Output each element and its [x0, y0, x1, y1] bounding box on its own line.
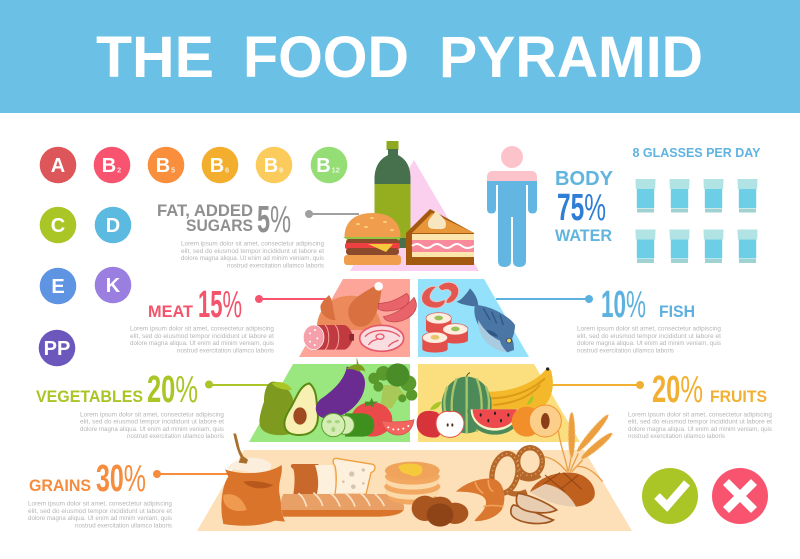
pyramid tier: fish	[418, 279, 529, 357]
text: meat description: elit, sed do eiusmod tempor incididunt ut labore et	[130, 333, 274, 340]
text: fish description: elit, sed do eiusmod tempor incididunt ut labore et	[577, 333, 721, 340]
vitamin B12	[311, 147, 347, 183]
label: fish 10%: 10%	[601, 284, 646, 326]
text: fish description: nostrud exercitation ullamco laboris	[577, 348, 675, 354]
vitamin B6: B	[210, 155, 224, 177]
text: grains description: Lorem ipsum dolor sit amet, consectetur adipiscing	[28, 500, 172, 508]
vitamin C	[40, 207, 76, 243]
text: meat description: nostrud exercitation ullamco laboris	[177, 348, 275, 354]
text: fat description: nostrud exercitation ullamco laboris	[227, 262, 325, 270]
vitamin B2: B	[102, 155, 116, 177]
icon: sausages	[378, 293, 416, 322]
glass 4	[738, 179, 758, 212]
text: vegetables description: nostrud exercitation ullamco laboris	[127, 433, 225, 440]
icon: pear	[259, 382, 293, 435]
vitamin A	[40, 147, 76, 183]
icon: sliced bread loaf	[291, 458, 375, 495]
vitamin B5	[148, 147, 184, 183]
vitamin B9: 9	[279, 166, 283, 174]
icon: watermelon	[442, 373, 492, 433]
label: fruits 20%: FRUITS	[710, 388, 767, 406]
icon: banana bunch	[488, 367, 553, 412]
icon: baguette	[281, 493, 404, 517]
icon: fish	[457, 288, 515, 352]
label: fat, added sugars: FAT, ADDED	[157, 202, 253, 220]
glass 5	[636, 230, 656, 263]
label: fish 10%: FISH	[659, 303, 695, 321]
icon: eggplant	[316, 357, 365, 418]
title: PYRAMID	[439, 25, 703, 90]
wheat ears	[568, 412, 614, 461]
title	[96, 25, 703, 90]
vitamin B2	[94, 147, 130, 183]
vitamin K	[95, 267, 131, 303]
leader line: meat	[255, 295, 331, 303]
title: FOOD	[243, 25, 409, 90]
label: body 75% water: WATER	[555, 226, 612, 245]
round loaf	[530, 472, 595, 507]
vitamin B12: B	[316, 155, 331, 177]
text: vegetables description: dolore magna aliqua. Ut enim ad minim veniam, quis	[80, 426, 225, 433]
vitamin B6: 6	[225, 166, 229, 174]
icon: broccoli	[368, 363, 417, 408]
text: vegetables description: Lorem ipsum dolor sit amet, consectetur adipiscing	[80, 412, 224, 418]
text: fish description: dolore magna aliqua. Ut enim ad minim veniam, quis	[577, 340, 722, 347]
text: fruits description: dolore magna aliqua. Ut enim ad minim veniam, quis	[628, 426, 773, 433]
vitamin A: A	[51, 155, 65, 177]
icon: cucumber	[322, 413, 374, 437]
icon: watermelon slice	[467, 409, 522, 435]
label: fat, added sugars: SUGARS	[186, 217, 253, 235]
label: fish 10%	[601, 284, 695, 326]
vitamin B2: 2	[117, 166, 121, 174]
icon: human body water level	[487, 146, 537, 267]
icon: roast chicken	[317, 282, 383, 330]
icon: cross badge	[712, 468, 768, 524]
icon: wheat stalks and loaf	[530, 412, 614, 507]
icon: pretzel	[488, 448, 542, 496]
text: fruits description: nostrud exercitation ullamco laboris	[628, 433, 726, 440]
vitamin B12: 12	[332, 166, 340, 174]
label: fat, added sugars	[157, 199, 291, 241]
pyramid tier: meat	[299, 279, 410, 357]
text: fat description: Lorem ipsum dolor sit amet, consectetur adipiscing	[181, 240, 324, 248]
text: grains description: dolore magna aliqua. Ut enim ad minim veniam, quis	[28, 515, 173, 522]
pyramid tier: vegetables	[249, 364, 410, 442]
text: fat description	[181, 240, 325, 270]
vitamin C: C	[51, 215, 65, 237]
glass 3	[704, 179, 724, 212]
vitamin B9: B	[264, 155, 278, 177]
text: fish description	[577, 326, 722, 354]
glass 1	[636, 179, 656, 212]
label: fruits 20%	[652, 369, 767, 411]
header band	[0, 0, 800, 113]
icon: bread slices	[511, 493, 557, 524]
wheat stems	[542, 430, 603, 482]
icon: sushi rolls	[422, 313, 468, 352]
vitamin E	[40, 268, 76, 304]
text: meat description: dolore magna aliqua. Ut enim ad minim veniam, quis	[130, 340, 275, 347]
leader line: fat	[305, 210, 359, 218]
text: fruits description	[628, 412, 773, 440]
pyramid tier: fats	[350, 160, 479, 271]
label: grains 30%: 30%	[96, 458, 146, 500]
label: body 75% water: 75%	[557, 187, 606, 229]
leader line: vegetables	[205, 380, 269, 388]
vitamin PP: PP	[44, 338, 70, 360]
icon: salami	[303, 325, 354, 350]
glass 2	[670, 179, 690, 212]
leader line: fish	[496, 295, 593, 303]
glass 6	[670, 230, 690, 263]
grains illustration	[221, 433, 557, 527]
label: grains 30%	[29, 458, 146, 500]
icon: shrimps	[422, 282, 459, 308]
label: body 75% water: BODY	[555, 168, 614, 190]
pyramid tier: fruits	[418, 364, 580, 442]
label: meat 15%	[148, 284, 242, 326]
vitamin D	[95, 207, 131, 243]
text: grains description	[28, 500, 173, 530]
text: fat description: elit, sed do eiusmod tempor incididunt ut labore et	[181, 248, 324, 255]
glasses of water grid	[636, 179, 758, 263]
text: fruits description: elit, sed do eiusmod tempor incididunt ut labore et	[628, 418, 772, 426]
text: fish description: Lorem ipsum dolor sit amet, consectetur adipiscing	[577, 326, 721, 332]
icon: cake slice	[406, 209, 474, 265]
fish foods illustration	[422, 282, 515, 352]
vitamin B9	[256, 147, 292, 183]
text: vegetables description	[80, 412, 225, 440]
leader line: fruits	[550, 381, 644, 389]
icon: tomato slice	[382, 420, 414, 435]
icon: peach	[512, 395, 561, 437]
label: fat, added sugars: 5%	[257, 199, 291, 241]
vitamin PP	[39, 330, 75, 366]
text: fat description: dolore magna aliqua. Ut enim ad minim veniam, quis	[181, 255, 325, 262]
glass 8	[738, 230, 758, 263]
label: vegetables 20%	[36, 369, 198, 411]
vegetables illustration	[259, 357, 417, 437]
glass 7	[704, 230, 724, 263]
text: meat description: Lorem ipsum dolor sit amet, consectetur adipiscing	[130, 326, 274, 332]
icon: pancake stack	[384, 462, 440, 505]
label: vegetables 20%: 20%	[147, 369, 198, 411]
vitamin E: E	[51, 276, 65, 298]
icon: tomato	[351, 398, 392, 437]
icon: croissant	[456, 479, 504, 521]
vitamin K: K	[106, 275, 121, 297]
text: grains description: nostrud exercitation ullamco laboris	[75, 522, 173, 530]
icon: flour sack	[221, 433, 285, 526]
label: meat 15%: MEAT	[148, 303, 193, 321]
leader line: grains	[153, 470, 229, 478]
text: vegetables description: elit, sed do eiusmod tempor incididunt ut labore et	[80, 418, 224, 426]
label: grains 30%: GRAINS	[29, 477, 91, 495]
text: fruits description: Lorem ipsum dolor sit amet, consectetur adipiscing	[628, 412, 772, 418]
icon: steak	[360, 325, 404, 351]
icon: apple	[417, 402, 464, 437]
vitamin badges	[39, 147, 347, 366]
text: grains description: elit, sed do eiusmod tempor incididunt ut labore et	[28, 508, 172, 515]
title: THE	[96, 25, 214, 90]
text: meat description	[130, 326, 275, 354]
vitamin B5: 5	[171, 166, 175, 174]
icon: wine bottle	[374, 141, 410, 248]
icon: braided challah	[412, 496, 468, 527]
fruits illustration	[417, 367, 561, 437]
vitamin D: D	[106, 215, 120, 237]
icon: check badge	[642, 468, 698, 524]
label: vegetables 20%: VEGETABLES	[36, 388, 143, 406]
vitamin B5: B	[156, 155, 170, 177]
icon: burger	[343, 213, 401, 265]
icon: avocado	[284, 383, 318, 435]
heading: 8 glasses per day: 8 GLASSES PER DAY	[632, 146, 761, 160]
pyramid tier: grains	[197, 450, 632, 531]
label: fruits 20%: 20%	[652, 369, 703, 411]
label: body 75% water	[555, 168, 614, 245]
label: meat 15%: 15%	[198, 284, 242, 326]
vitamin B6	[202, 147, 238, 183]
meat foods illustration	[303, 282, 416, 351]
